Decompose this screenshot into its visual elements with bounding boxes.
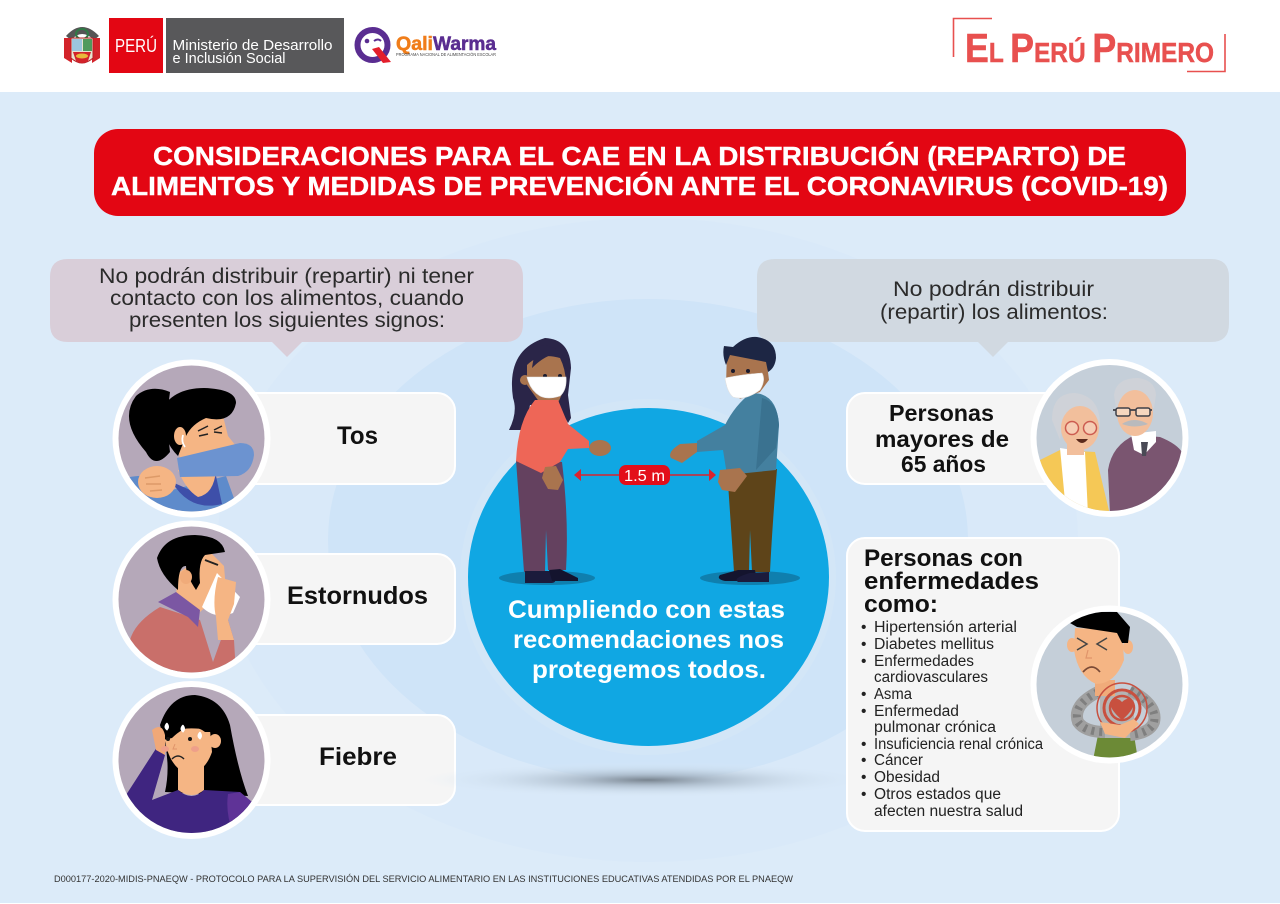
list of illnesses: afecten nuestra salud xyxy=(874,803,1023,820)
title banner: CONSIDERACIONES PARA EL CAE EN LA DISTRIBUCIÓN (REPARTO) DE xyxy=(153,141,1126,171)
figure: man with mask xyxy=(670,337,800,585)
speech bubble: distribution xyxy=(757,259,1229,357)
panel heading: Personas con xyxy=(864,545,1023,572)
list of illnesses: • xyxy=(861,736,866,753)
center message xyxy=(508,596,785,684)
card: older people: Personas xyxy=(889,400,994,426)
header band xyxy=(0,0,1280,92)
list of illnesses: • xyxy=(861,653,866,670)
wordmark: Qali xyxy=(396,34,433,55)
list of illnesses: Hipertensión arterial xyxy=(874,619,1017,636)
panel: people with illnesses xyxy=(847,538,1119,831)
list of illnesses xyxy=(861,619,1043,820)
title banner: ALIMENTOS Y MEDIDAS DE PREVENCIÓN ANTE EL CORONAVIRUS (COVID-19) xyxy=(111,171,1168,201)
icon: man sneezing xyxy=(112,520,275,680)
center message: protegemos todos. xyxy=(532,656,766,684)
icon: woman with fever xyxy=(112,680,275,842)
icon: coat of arms xyxy=(64,27,100,63)
card: Fiebre xyxy=(220,715,455,805)
red PERU block xyxy=(109,18,163,73)
logo: Peru government xyxy=(64,18,344,73)
ministry block: e Inclusión Social xyxy=(172,51,286,67)
speech bubble: distribution: No podrán distribuir xyxy=(893,278,1094,301)
icon: man with chest pain xyxy=(1030,605,1190,765)
panel heading: enfermedades xyxy=(864,568,1039,595)
list of illnesses: Enfermedad xyxy=(874,703,959,720)
list of illnesses: • xyxy=(861,686,866,703)
tagline: PROGRAMA NACIONAL DE ALIMENTACIÓN ESCOLAR xyxy=(396,51,497,57)
ministry block: Ministerio de Desarrollo xyxy=(172,38,332,54)
logo: Qali Warma xyxy=(358,30,497,63)
ministry block xyxy=(166,18,344,73)
icon: elderly couple xyxy=(1030,359,1190,520)
red PERU block: PERÚ xyxy=(115,35,157,56)
card: Fiebre: Fiebre xyxy=(319,743,397,771)
title banner xyxy=(94,129,1186,216)
list of illnesses: • xyxy=(861,752,866,769)
list of illnesses: cardiovasculares xyxy=(874,669,988,686)
list of illnesses: Insuficiencia renal crónica xyxy=(874,736,1043,753)
center message: recomendaciones nos xyxy=(513,626,784,654)
distance arrow 1.5 m xyxy=(574,465,716,485)
card: Estornudos xyxy=(220,554,455,644)
list of illnesses: • xyxy=(861,619,866,636)
list of illnesses: • xyxy=(861,769,866,786)
center message: Cumpliendo con estas xyxy=(508,596,785,624)
distance arrow 1.5 m: 1.5 m xyxy=(624,468,665,485)
card: older people: 65 años xyxy=(901,451,986,477)
list of illnesses: • xyxy=(861,786,866,803)
list of illnesses: Obesidad xyxy=(874,769,940,786)
ground shadow xyxy=(423,762,873,798)
speech bubble: signs: presenten los siguientes signos: xyxy=(129,309,445,332)
figure: woman with mask xyxy=(499,338,611,585)
card: older people: mayores de xyxy=(875,426,1009,452)
panel heading xyxy=(864,545,1039,618)
list of illnesses: Diabetes mellitus xyxy=(874,636,994,653)
list of illnesses: Enfermedades xyxy=(874,653,974,670)
wordmark: EL PERÚ PRIMERO xyxy=(965,25,1214,71)
icon: woman coughing xyxy=(112,360,275,520)
icon: Q face xyxy=(358,30,391,63)
speech bubble: signs xyxy=(50,259,523,357)
card: Tos: Tos xyxy=(337,422,378,450)
frame xyxy=(954,18,1225,72)
panel heading: como: xyxy=(864,591,938,618)
card: Estornudos: Estornudos xyxy=(287,582,428,610)
list of illnesses: pulmonar crónica xyxy=(874,719,996,736)
card: Tos xyxy=(220,393,455,484)
list of illnesses: Cáncer xyxy=(874,752,923,769)
card: older people xyxy=(847,393,1072,484)
list of illnesses: Asma xyxy=(874,686,912,703)
speech bubble: distribution: (repartir) los alimentos: xyxy=(880,301,1108,324)
list of illnesses: • xyxy=(861,636,866,653)
footer source note: D000177-2020-MIDIS-PNAEQW - PROTOCOLO PARA LA SUPERVISIÓN DEL SERVICIO ALIMENTARIO EN LAS INSTITUCIONES EDUCATIVAS ATENDIDAS POR EL PNAEQW xyxy=(54,874,793,885)
list of illnesses: Otros estados que xyxy=(874,786,1001,803)
speech bubble: signs: No podrán distribuir (repartir) ni tener xyxy=(99,265,474,288)
center circle panel xyxy=(468,408,829,746)
logo: El Perú Primero xyxy=(954,18,1225,72)
list of illnesses: • xyxy=(861,703,866,720)
speech bubble: signs: contacto con los alimentos, cuando xyxy=(110,287,464,310)
logo: Qali Warma: Warma xyxy=(433,34,496,55)
